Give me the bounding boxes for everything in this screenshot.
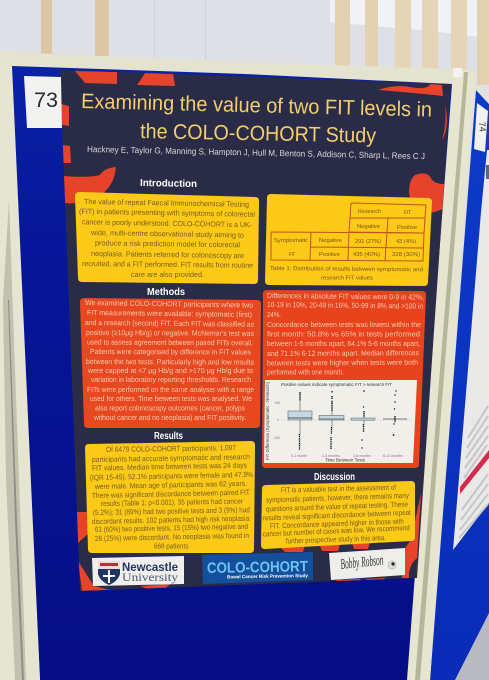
panel: discussion: FIT. Concordance appeared higher in those with [270, 517, 404, 530]
panel: results continued: 24%. [267, 310, 281, 319]
chart: FIT difference box plot: FIT Difference (Symptomatic - Research) [265, 382, 270, 460]
panel: methods: FIT measurements were available: symptomatic (first) [87, 308, 252, 319]
heading: results: Results [154, 431, 183, 442]
panel: introduction: produce a risk prediction model for colorectal [95, 238, 240, 249]
panel: results continued: between tests were higher when tests were both [267, 358, 418, 367]
panel: introduction: The value of repeat Faecal Immunochemical Testing [84, 197, 249, 209]
poster sheet [60, 70, 451, 591]
panel: discussion: FIT is a valuable test in the assessment of [281, 483, 397, 494]
panel: results: discordant results. 102 patients had high risk neoplasia: [92, 514, 251, 526]
panel: results table: Positive [397, 225, 417, 231]
panel: results table: Research [358, 209, 381, 215]
logo: COLO-COHORT: Bowel Cancer Risk Prevention Study [227, 573, 308, 580]
panel: methods: and a research (second) FIT. Each FIT was classified as [85, 318, 254, 329]
logo: Bobby Robson: Bobby Robson [340, 553, 384, 573]
panel: results continued: first month: 50.8% vs 65% in tests performed [267, 330, 420, 338]
panel: results table: FIT [289, 252, 295, 258]
panel: discussion: cancer but number of cases was low. We recommend [263, 523, 410, 538]
authors: Hackney E, Taylor G, Manning S, Hampton J, Hull M, Benton S, Addison C, Sharp L, Rees C J [87, 144, 425, 161]
panel: methods [80, 298, 261, 428]
panel: results continued [262, 290, 426, 468]
panel: results: There was significant discordance between paired FIT [92, 488, 250, 500]
panel: introduction: cancer is poorly understood. COLO-COHORT is a UK- [82, 217, 253, 229]
chart: FIT difference box plot: 100 [274, 401, 280, 405]
panel: methods: also report colonoscopy outcomes (cancer, polyps [95, 404, 245, 412]
panel: results: were male. Mean age of participants was 62 years. [94, 479, 247, 491]
panel: methods: without cancer and no neoplasia) and FIT positivity. [93, 413, 246, 422]
panel: results table: Symptomatic [274, 238, 308, 244]
panel: results continued: Differences in absolute FIT values were 0-9 in 42%, [267, 291, 424, 302]
panel: introduction: (FIT) in patients presenting with symptoms of colorectal [79, 207, 255, 219]
heading: discussion: Discussion [314, 472, 355, 483]
panel: methods: positive (≥10μg Hb/g) or negative. McNemar's test was [86, 328, 254, 338]
icon: football [388, 561, 396, 569]
panel: results: 668 patients. [154, 542, 190, 550]
icon: university shield [98, 561, 120, 585]
decorative orange shapes [61, 71, 448, 591]
chart: FIT difference box plot: 1-3 months [322, 454, 340, 458]
panel: introduction: recruited, and a FIT performed. FIT results from routine [82, 259, 253, 270]
panel: discussion: questions around the value of repeat testing. These [266, 500, 408, 513]
panel: results table: 291 (27%) [355, 239, 381, 245]
panel: results table: 328 (30%) [392, 252, 420, 258]
poster number 73: 73 [34, 89, 58, 112]
logo: Newcastle University: University [122, 572, 178, 584]
panel: results table: 43 (4%) [396, 239, 416, 245]
panel: methods: used for others. Time between tests was analysed. We [90, 394, 252, 403]
chart: FIT difference box plot: Positive values indicate symptomatic FIT > research FIT [281, 382, 392, 387]
panel: results continued: and 71.1% 6-12 months apart. Median differences [267, 348, 419, 358]
poster number 74 [474, 103, 488, 152]
neighbouring poster on the right [453, 150, 489, 550]
panel: results: (5.2%); 31 (89%) had two positive tests and 3 (9%) had [93, 505, 250, 517]
panel: results continued: between 1-5 months apart, 64.1% 5-6 months apart, [267, 339, 420, 348]
panel: introduction: neoplasia. Patients referred for colonoscopy are [91, 249, 244, 260]
panel: results continued: 10-19 in 10%, 20-49 in 16%, 50-99 in 8% and >100 in [267, 300, 423, 311]
top board frame [0, 50, 475, 84]
heading: methods: Methods [147, 287, 185, 298]
panel: methods: variation in laboratory reporting thresholds. Research [91, 375, 251, 384]
floor corner [455, 613, 489, 680]
panel: methods: We examined COLO-COHORT participants where two [85, 298, 253, 310]
left board frame [0, 50, 40, 680]
logo: COLO-COHORT [202, 552, 313, 584]
heading: introduction: Introduction [140, 178, 197, 190]
panel: introduction [75, 192, 259, 284]
title: Examining the value of two FIT levels in [81, 90, 432, 122]
chart: FIT difference box plot: Time Between Tests [325, 458, 366, 462]
panel: methods: FITs were performed on the same analyser with a range [87, 385, 254, 394]
panel: methods: between the two tests. Particularly high and low results [86, 357, 254, 367]
logo: Newcastle University: Newcastle [122, 562, 178, 574]
panel: results table [265, 194, 432, 286]
panel: methods: Patients were categorised by difference in FIT values [90, 347, 251, 357]
panel: introduction: care are also provided. [131, 270, 204, 279]
panel: results table: FIT [404, 210, 411, 216]
chart: FIT difference box plot: 6-12 months [383, 454, 403, 458]
panel: methods: were capped at <7 μg Hb/g and >170 μg Hb/g due to [87, 366, 253, 375]
panel: results table: Table 1: Distribution of results between symptomatic and [270, 266, 423, 273]
chart: FIT difference box plot: -100 [273, 436, 280, 440]
panel: results [85, 441, 255, 553]
panel: discussion: results reveal significant discordance between repeat [263, 508, 411, 522]
logo: COLO-COHORT: COLO-COHORT [207, 558, 308, 577]
panel: discussion: symptomatic patients, however, there remains many [266, 491, 409, 504]
chart: FIT difference box plot [264, 380, 417, 463]
poster number 74: 74 [477, 121, 488, 132]
chart: FIT difference box plot: 0-1 month [291, 454, 307, 458]
poster number 73 [24, 76, 62, 128]
panel: results continued: Concordance between tests was lowest within the [267, 320, 421, 329]
right board frame [407, 68, 489, 680]
panel: results: 26 (25%) were discordant. No neoplasia was found in [95, 531, 249, 543]
panel: results: results (Table 1: p<0.001). 35 patients had cancer [101, 497, 243, 508]
panel: results: 61 (60%) two positive tests, 15 (15%) two negative and [95, 522, 248, 534]
panel: results table: Negative [319, 238, 342, 244]
chart: FIT difference box plot: 3-6 months [353, 454, 371, 458]
panel: results: FIT values. Median time between tests was 24 days [92, 461, 247, 472]
panel: results: participants had accurate symptomatic and research [92, 452, 250, 464]
title [81, 90, 432, 148]
title: the COLO-COHORT Study [140, 120, 377, 148]
logo: Newcastle University [92, 556, 184, 586]
panel: introduction: wide, multi-centre observational study aiming to [90, 228, 244, 240]
panel: results: Of 6479 COLO-COHORT participants, 1,097 [106, 443, 236, 454]
panel: results table: research FIT values [321, 276, 373, 282]
panel: discussion: further prospective study in this area. [286, 533, 386, 545]
panel: results: (IQR 15-45). 52.1% participants were female and 47.9% [90, 470, 253, 482]
panel: results table: 435 (40%) [353, 252, 380, 258]
panel: results table: Positive [319, 252, 340, 258]
panel: methods: used to assess agreement between paired FITs overall. [87, 338, 253, 347]
logo: Bobby Robson [329, 548, 405, 580]
right blue display board [430, 90, 489, 680]
panel: results table: Negative [357, 224, 380, 230]
chart: FIT difference box plot: 0 [277, 418, 279, 422]
panel: results continued: performed with one month. [267, 368, 344, 376]
panel: discussion [261, 481, 415, 549]
